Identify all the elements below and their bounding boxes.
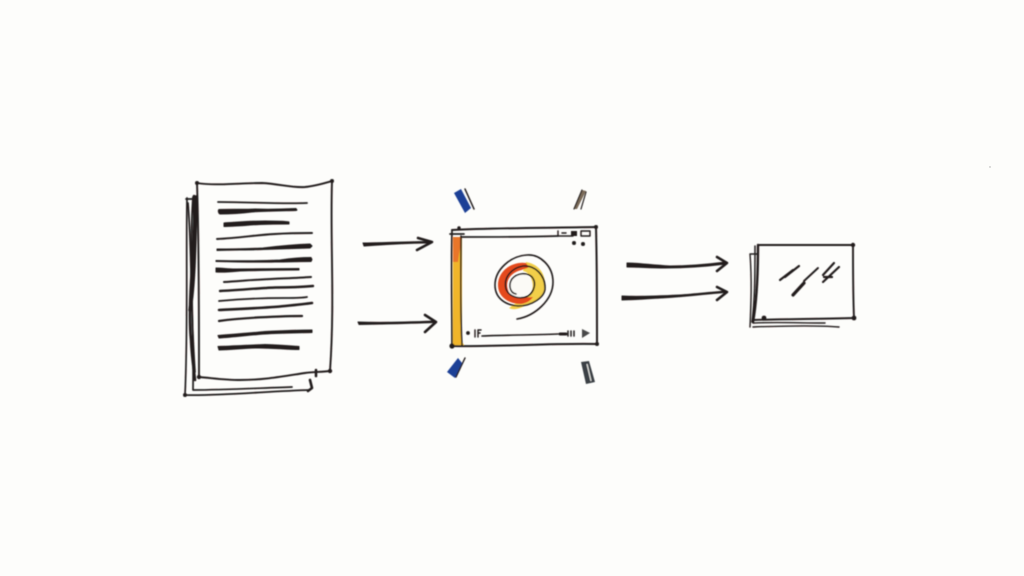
text lines [216,202,313,350]
icon: video frame with swirl [449,225,599,349]
arrow: document to frame, upper [363,238,432,250]
top-right controls [558,231,590,246]
swirl: orange and yellow ring [495,255,553,319]
yellow sidebar [453,237,464,345]
tick: dark bottom-right [581,361,595,384]
card outline [753,245,854,320]
icon: stacked text document [183,179,334,397]
orange sidebar top [453,237,462,262]
tick: blue top-left [454,189,474,213]
bottom playback bar [466,329,590,338]
front page outline [197,181,332,380]
arrow: frame to thumbnail, lower [622,287,727,300]
arrow: frame to thumbnail, upper [627,257,727,271]
icon: thumbnail card [750,243,856,327]
frame outline [449,225,599,349]
tick: blue bottom-left [447,358,465,378]
glass glare marks [780,263,839,295]
tick: brown top-right [574,190,586,209]
back sheets [183,196,316,397]
arrow: document to frame, lower [358,315,436,332]
